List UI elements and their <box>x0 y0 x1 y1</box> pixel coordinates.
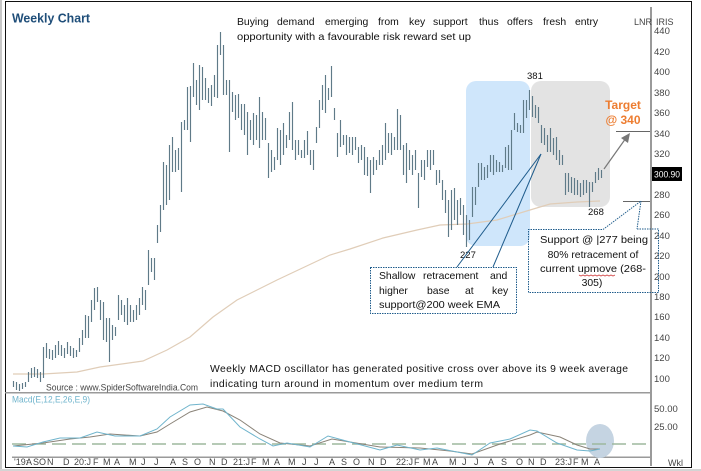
time axis labels: J <box>141 457 146 467</box>
callout: support at 277 <box>528 201 658 292</box>
text: buying demand commentary: Buying <box>237 17 269 28</box>
text: buying demand commentary: demand <box>277 17 315 28</box>
text: buying demand commentary: fresh <box>543 17 566 28</box>
time axis labels: A <box>488 457 494 467</box>
price axis labels: 100 <box>654 374 670 385</box>
title: Weekly Chart <box>12 12 91 26</box>
time axis labels: F <box>414 457 420 467</box>
time axis labels: O <box>39 457 46 467</box>
label: swing high 381: 381 <box>527 71 543 82</box>
target callout: Target <box>605 98 641 112</box>
time axis labels: S <box>501 457 507 467</box>
text: buying demand commentary: emerging <box>325 17 369 28</box>
time axis labels: A <box>26 457 32 467</box>
time axis labels: M <box>581 457 588 467</box>
time axis labels: '19: <box>14 457 28 467</box>
time axis labels: J <box>154 457 158 467</box>
callout: shallow retracement: and <box>490 271 508 282</box>
time axis labels <box>14 457 600 467</box>
price axis labels: 240 <box>654 231 670 242</box>
time axis labels: M <box>103 457 110 467</box>
time axis labels: S <box>182 457 188 467</box>
callout: shallow retracement: Shallow <box>379 271 416 282</box>
text: buying demand commentary: offers <box>507 17 533 28</box>
source note: Source : www.SpiderSoftwareIndia.Com <box>46 382 198 392</box>
time axis labels: M <box>449 457 456 467</box>
callout: support at 277: 305) <box>582 278 602 289</box>
price axis labels <box>634 17 683 468</box>
time axis labels: N <box>368 457 374 467</box>
time axis labels: F <box>573 457 579 467</box>
time axis labels: N <box>209 457 216 467</box>
price axis labels: 180 <box>654 292 670 303</box>
time axis labels: S <box>341 457 347 467</box>
time axis labels: D <box>221 457 228 467</box>
time axis labels: A <box>274 457 280 467</box>
callout: shallow retracement: at <box>465 286 474 297</box>
text: buying demand commentary: support <box>433 17 468 28</box>
time axis labels: A <box>432 457 438 467</box>
time axis labels: M <box>423 457 430 467</box>
callout: support at 277: 80% retracement of <box>548 250 638 261</box>
time axis labels: J <box>314 457 318 467</box>
target callout: @ 340 <box>605 113 641 127</box>
price axis labels: 320 <box>654 149 670 160</box>
time axis labels: N <box>528 457 534 467</box>
text: MACD commentary: Weekly MACD oscillator has generated positive cross over above its 9 week average <box>210 364 628 375</box>
highlight: blue upmove zone <box>466 81 530 246</box>
target callout <box>605 98 641 127</box>
price axis labels: 360 <box>654 108 670 119</box>
time axis labels: 20:J <box>74 457 91 467</box>
callout: shallow retracement: support@200 week EMA <box>379 300 500 311</box>
callout: shallow retracement <box>370 268 516 314</box>
time axis labels: 23:J <box>555 457 572 467</box>
price axis labels: 120 <box>654 353 670 364</box>
text: MACD commentary: indicating turn around in momentum over medium term <box>210 379 483 390</box>
text: buying demand commentary: key <box>409 17 426 28</box>
time axis labels: M <box>129 457 136 467</box>
MACD signal line <box>13 407 600 454</box>
time axis labels: D <box>380 457 387 467</box>
price axis labels: IRIS <box>656 17 674 27</box>
price axis labels: LNR <box>634 17 653 27</box>
time axis labels: A <box>170 457 176 467</box>
price axis labels: 220 <box>654 251 670 262</box>
time axis labels: O <box>516 457 523 467</box>
text: buying demand commentary: from <box>378 17 399 28</box>
target level line <box>616 130 650 132</box>
price bars <box>14 32 602 391</box>
time axis labels: O <box>194 457 201 467</box>
time axis labels: J <box>462 457 466 467</box>
support level line <box>623 200 650 202</box>
price axis labels: 140 <box>654 333 670 344</box>
callout: shallow retracement: key <box>492 286 509 297</box>
time axis labels: 21:J <box>233 457 250 467</box>
price axis labels: 160 <box>654 312 670 323</box>
time axis labels: A <box>114 457 120 467</box>
price axis labels: 380 <box>654 88 670 99</box>
callout: support at 277: current upmove (268- <box>540 264 646 275</box>
time axis labels: D <box>63 457 70 467</box>
price axis labels: 420 <box>654 47 670 58</box>
200 week EMA line <box>13 201 600 374</box>
text: buying demand commentary <box>237 17 599 43</box>
time axis labels: M <box>262 457 270 467</box>
time axis labels: M <box>288 457 296 467</box>
price axis labels: 340 <box>654 129 670 140</box>
time axis labels: J <box>474 457 478 467</box>
callout: shallow retracement: higher <box>379 286 408 297</box>
price axis labels: 200 <box>654 272 670 283</box>
callout: shallow retracement: retracement <box>423 271 479 282</box>
arrow: upside to target <box>604 133 630 169</box>
label: swing low 227: 227 <box>460 250 476 261</box>
time axis labels: A <box>329 457 335 467</box>
price axis labels: 260 <box>654 210 670 221</box>
time axis labels: F <box>251 457 257 467</box>
time axis labels: S <box>33 457 39 467</box>
MACD panel label: Macd(E,12,E,26,E,9) <box>12 394 90 406</box>
time axis labels: 22:J <box>396 457 413 467</box>
last price tag: 300.90 <box>654 170 680 180</box>
text: buying demand commentary: thus <box>479 17 499 28</box>
price axis labels: 50.00 <box>654 404 678 415</box>
price axis labels: 440 <box>654 26 670 37</box>
price axis labels: 25.00 <box>654 422 678 433</box>
MACD highlight circle <box>586 424 614 458</box>
callout: shallow retracement: base <box>427 286 450 297</box>
MACD zero line <box>12 443 646 445</box>
time axis labels: D <box>540 457 547 467</box>
time axis labels: N <box>47 457 54 467</box>
time axis labels: O <box>353 457 360 467</box>
label: swing low 268: 268 <box>588 207 604 218</box>
MACD line <box>13 404 600 455</box>
time axis labels: J <box>302 457 306 467</box>
time axis labels: F <box>93 457 99 467</box>
price axis labels: 280 <box>654 190 670 201</box>
text: MACD commentary <box>210 364 628 390</box>
price axis labels: Wkl <box>668 458 683 468</box>
price axis labels: 400 <box>654 67 670 78</box>
leader lines: retracement callout <box>457 154 541 267</box>
text: buying demand commentary: entry <box>575 17 599 28</box>
time axis labels: A <box>594 457 600 467</box>
callout: support at 277: Support @ |277 being <box>540 235 648 246</box>
highlight: grey retracement zone <box>531 81 610 207</box>
text: buying demand commentary: opportunity with a favourable risk reward set up <box>237 32 471 43</box>
